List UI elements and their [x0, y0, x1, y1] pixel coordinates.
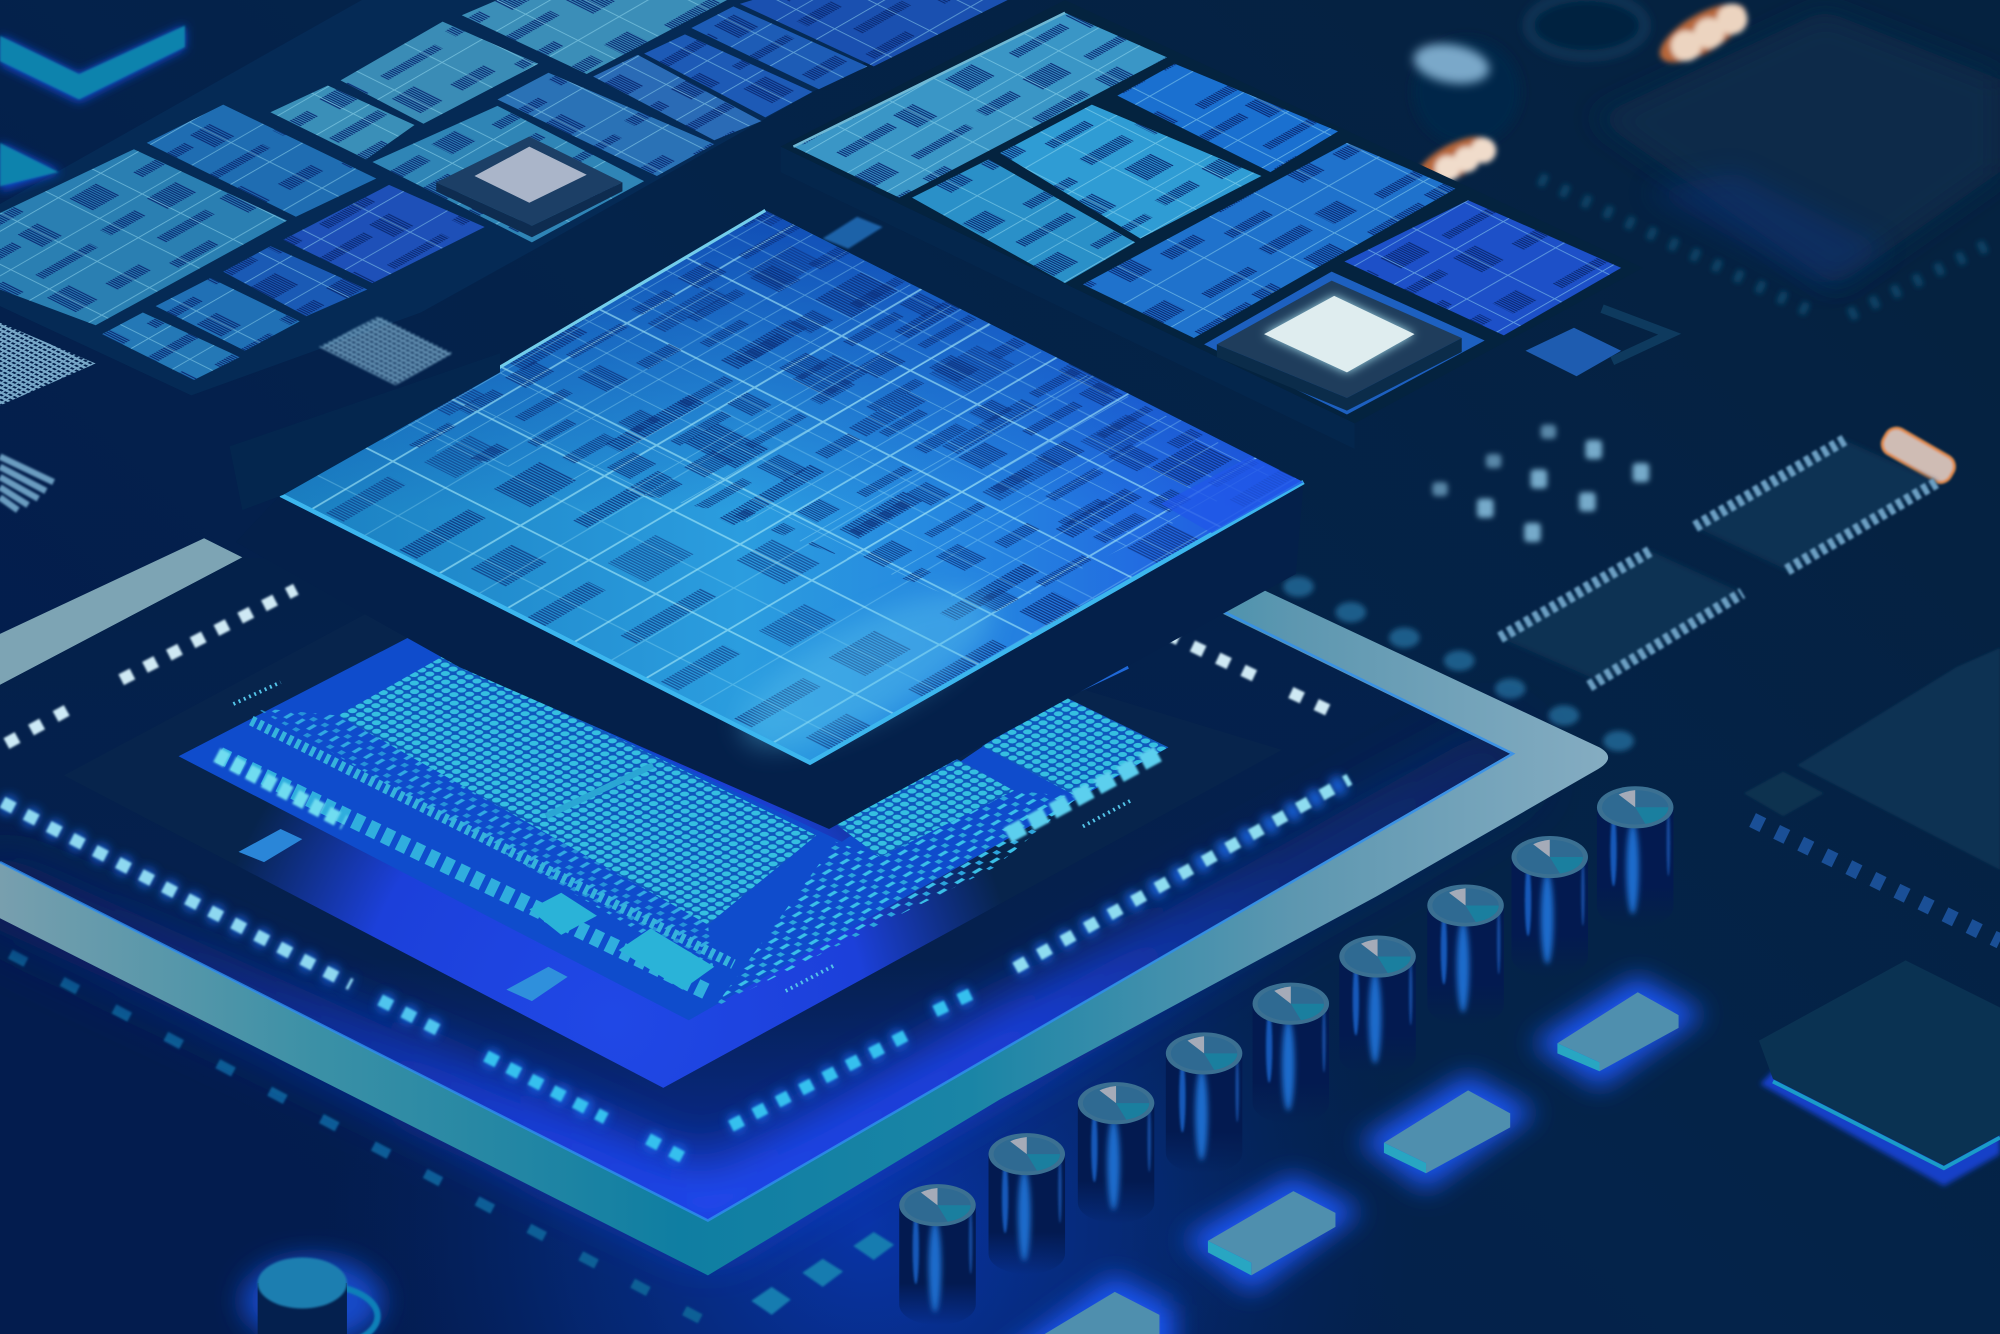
right lower ICs: [1744, 648, 2000, 1186]
lower-left pads: [3, 802, 351, 985]
IC pins: [1540, 179, 2000, 315]
cells: [793, 13, 1167, 198]
capacitor ring: [265, 1286, 378, 1334]
IC body left: [1500, 551, 1742, 682]
IC pins row: [1753, 820, 2000, 941]
bottom-left capacitor: [242, 1257, 383, 1334]
frame inner edge highlight: [0, 612, 1513, 1220]
right side bright components: [1008, 752, 1161, 835]
striped pad left: [0, 457, 54, 510]
substrate inside frame: [0, 557, 1510, 1220]
frame upper-left strip: [0, 538, 242, 685]
right small chip top: [1264, 296, 1415, 372]
top die circuit texture: [281, 210, 1304, 763]
component 2: [1384, 1090, 1510, 1173]
capacitor halo: [242, 1257, 383, 1334]
orange capsule: [1878, 424, 1959, 487]
substrate blue edge glow: [0, 752, 1518, 1212]
large IC far right: [1594, 10, 2000, 287]
pads upper left: [6, 708, 71, 744]
pads group five: [731, 1034, 908, 1126]
divider bar: [546, 765, 653, 816]
extra dense texture in upper half: [383, 210, 1276, 612]
outer light frame: [0, 587, 1608, 1275]
sparse component field right: [714, 791, 1078, 1008]
memory grid left: [338, 654, 816, 925]
orange lights: [1410, 0, 1959, 487]
IC blue underside glow: [1645, 172, 1888, 287]
upper-left chevron glow block: [0, 26, 185, 191]
IC lower right glow: [1760, 1069, 2000, 1186]
right chip top edge highlight: [793, 13, 1065, 147]
solder pad cluster: [1432, 425, 1649, 542]
IC upper right: [1797, 648, 2000, 870]
dim board traces lower left: [10, 954, 714, 1326]
glowing rectangular components: [1033, 992, 1679, 1334]
left small chip top: [474, 147, 587, 203]
pad bottom: [506, 967, 568, 1001]
pad glow halo: [3, 779, 1349, 1161]
beaded ridge: [251, 721, 733, 964]
large component block: [529, 893, 597, 935]
bulb highlight: [1411, 38, 1493, 89]
bulb body: [1413, 38, 1520, 145]
right small chip shade: [1217, 338, 1462, 411]
pads upper left two: [121, 589, 296, 680]
capacitor top: [258, 1257, 347, 1308]
capacitor body: [258, 1283, 347, 1334]
capacitors back: [1597, 786, 1673, 927]
IC body right: [1695, 440, 1938, 570]
top-right blurred components: [1411, 0, 2000, 315]
bracket outline right: [1602, 309, 1670, 361]
left small chip socket: [436, 136, 622, 226]
hatched pad left edge: [0, 323, 96, 406]
component row: [219, 755, 708, 992]
pad left: [239, 829, 302, 862]
memory grid far right: [982, 696, 1168, 797]
cell textures: [793, 13, 1621, 338]
hatched pad middle: [319, 316, 453, 385]
chip side: [781, 147, 1355, 449]
pads group two: [380, 1000, 449, 1036]
top die front-left edge: [281, 482, 1304, 763]
right small chip glow: [1264, 296, 1415, 372]
zigzag pins: [1500, 440, 1938, 686]
small ICs with zigzag pins: [1500, 440, 1938, 686]
pads group right: [1015, 779, 1349, 968]
board pads near bottom: [751, 1232, 894, 1315]
board glow under chip: [0, 638, 2000, 1334]
ring capacitor: [1528, 0, 1645, 56]
IC lower right body: [1759, 960, 2000, 1166]
upper-left chip backing: [0, 0, 1020, 395]
pads upper right: [1167, 634, 1260, 678]
bright component blocks: [217, 755, 344, 823]
glowing bond pads: [3, 589, 1349, 1161]
memory grid right: [835, 759, 1014, 857]
small bar above die: [1079, 666, 1128, 689]
top die dark top corner: [281, 210, 1304, 763]
component 4: [1033, 1292, 1159, 1334]
second chevron: [0, 143, 61, 191]
die dark surface: [64, 523, 1282, 1088]
main top die shadow side: [236, 210, 1304, 829]
bright blurry circuit patch: [722, 563, 1013, 776]
pads upper right two: [1291, 693, 1337, 714]
upper-left chip cells: [0, 0, 1008, 380]
top die back-left edge: [491, 210, 765, 372]
chip backing: [781, 0, 1643, 423]
pads group six: [935, 992, 974, 1011]
main top die: [281, 210, 1304, 776]
analog blocks: [619, 928, 714, 990]
mid orange light: [1410, 127, 1498, 194]
component 3: [1208, 1191, 1335, 1275]
small blue block between chips: [823, 217, 883, 249]
dim board pads right of frame: [1283, 576, 1634, 751]
lower die: [64, 523, 1282, 1088]
upper-right chip: [781, 0, 1643, 449]
capacitor row: [899, 786, 1673, 1325]
left small chip shade: [436, 182, 622, 237]
tiny dot lines: [233, 682, 1130, 991]
IC left tab: [1744, 772, 1824, 816]
sparse component field left: [255, 708, 714, 976]
die blue surface: [64, 523, 1282, 1088]
hatched pad right: [1526, 328, 1621, 376]
pads group three: [486, 1056, 606, 1118]
pads group four: [648, 1139, 689, 1161]
texture overlay left chip: [0, 0, 1008, 380]
top die right edge fill: [1161, 457, 1304, 533]
top die face: [281, 210, 1304, 763]
top orange light: [1651, 0, 1754, 74]
circuit field: [179, 638, 1168, 1020]
notch shadow on top die: [230, 353, 500, 510]
right small chip socket: [1217, 281, 1462, 398]
IC lower right teal edge: [1773, 1081, 2000, 1168]
component 1: [1557, 992, 1679, 1071]
